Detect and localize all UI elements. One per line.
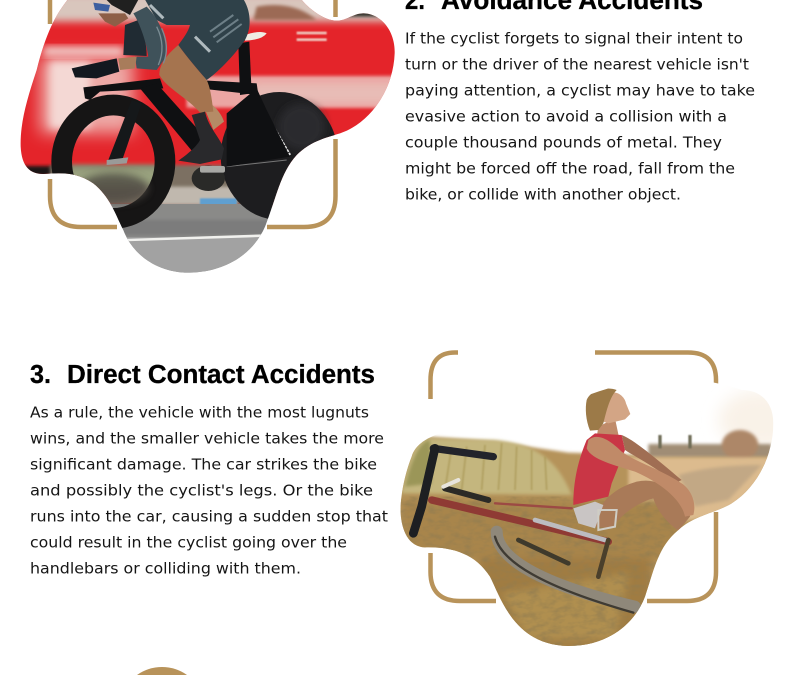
photo: cyclist in racing blob <box>0 0 400 284</box>
text block: direct contact accidents description <box>30 404 388 578</box>
bike frame <box>83 42 290 191</box>
text block: avoidance accidents description: might be forced off the road, fall from the <box>405 160 735 178</box>
rear leg behind frame <box>206 105 224 130</box>
rider <box>72 0 250 164</box>
woman <box>573 388 694 531</box>
front wheel <box>62 100 165 218</box>
heading: 3. Direct Contact Accidents: 3. <box>30 361 51 389</box>
text block: direct contact accidents description: handlebars or colliding with them. <box>30 560 301 578</box>
text block: avoidance accidents description: bike, or collide with another object. <box>405 186 681 204</box>
photo: woman resting beside a bicycle <box>400 382 774 646</box>
decorative frame: lower photo <box>430 352 716 601</box>
text block: direct contact accidents description: significant damage. The car strikes the bike <box>30 456 377 474</box>
text block: avoidance accidents description <box>405 30 755 204</box>
text block: avoidance accidents description: couple thousand pounds of metal. They <box>405 134 722 152</box>
heading: 3. Direct Contact Accidents: Direct Contact Accidents <box>67 361 375 389</box>
next section badge (cropped gold circle) <box>137 667 187 675</box>
text block: avoidance accidents description: evasive action to avoid a collision with a <box>405 108 727 126</box>
rear disc wheel <box>221 92 338 220</box>
text block: avoidance accidents description: turn or the driver of the nearest vehicle isn't <box>405 56 749 74</box>
bicycle <box>413 448 635 613</box>
text block: avoidance accidents description: paying attention, a cyclist may have to take <box>405 82 755 100</box>
text block: direct contact accidents description: runs into the car, causing a sudden stop that <box>30 508 388 526</box>
text block: direct contact accidents description: wins, and the smaller vehicle takes the more <box>30 430 384 448</box>
text block: direct contact accidents description: could result in the cyclist going over the <box>30 534 347 552</box>
text block: direct contact accidents description: As a rule, the vehicle with the most lugnuts <box>30 404 369 422</box>
decorative frame: top photo <box>50 0 336 227</box>
text block: avoidance accidents description: If the cyclist forgets to signal their intent to <box>405 30 743 48</box>
text block: direct contact accidents description: and possibly the cyclist's legs. Or the bike <box>30 482 373 500</box>
